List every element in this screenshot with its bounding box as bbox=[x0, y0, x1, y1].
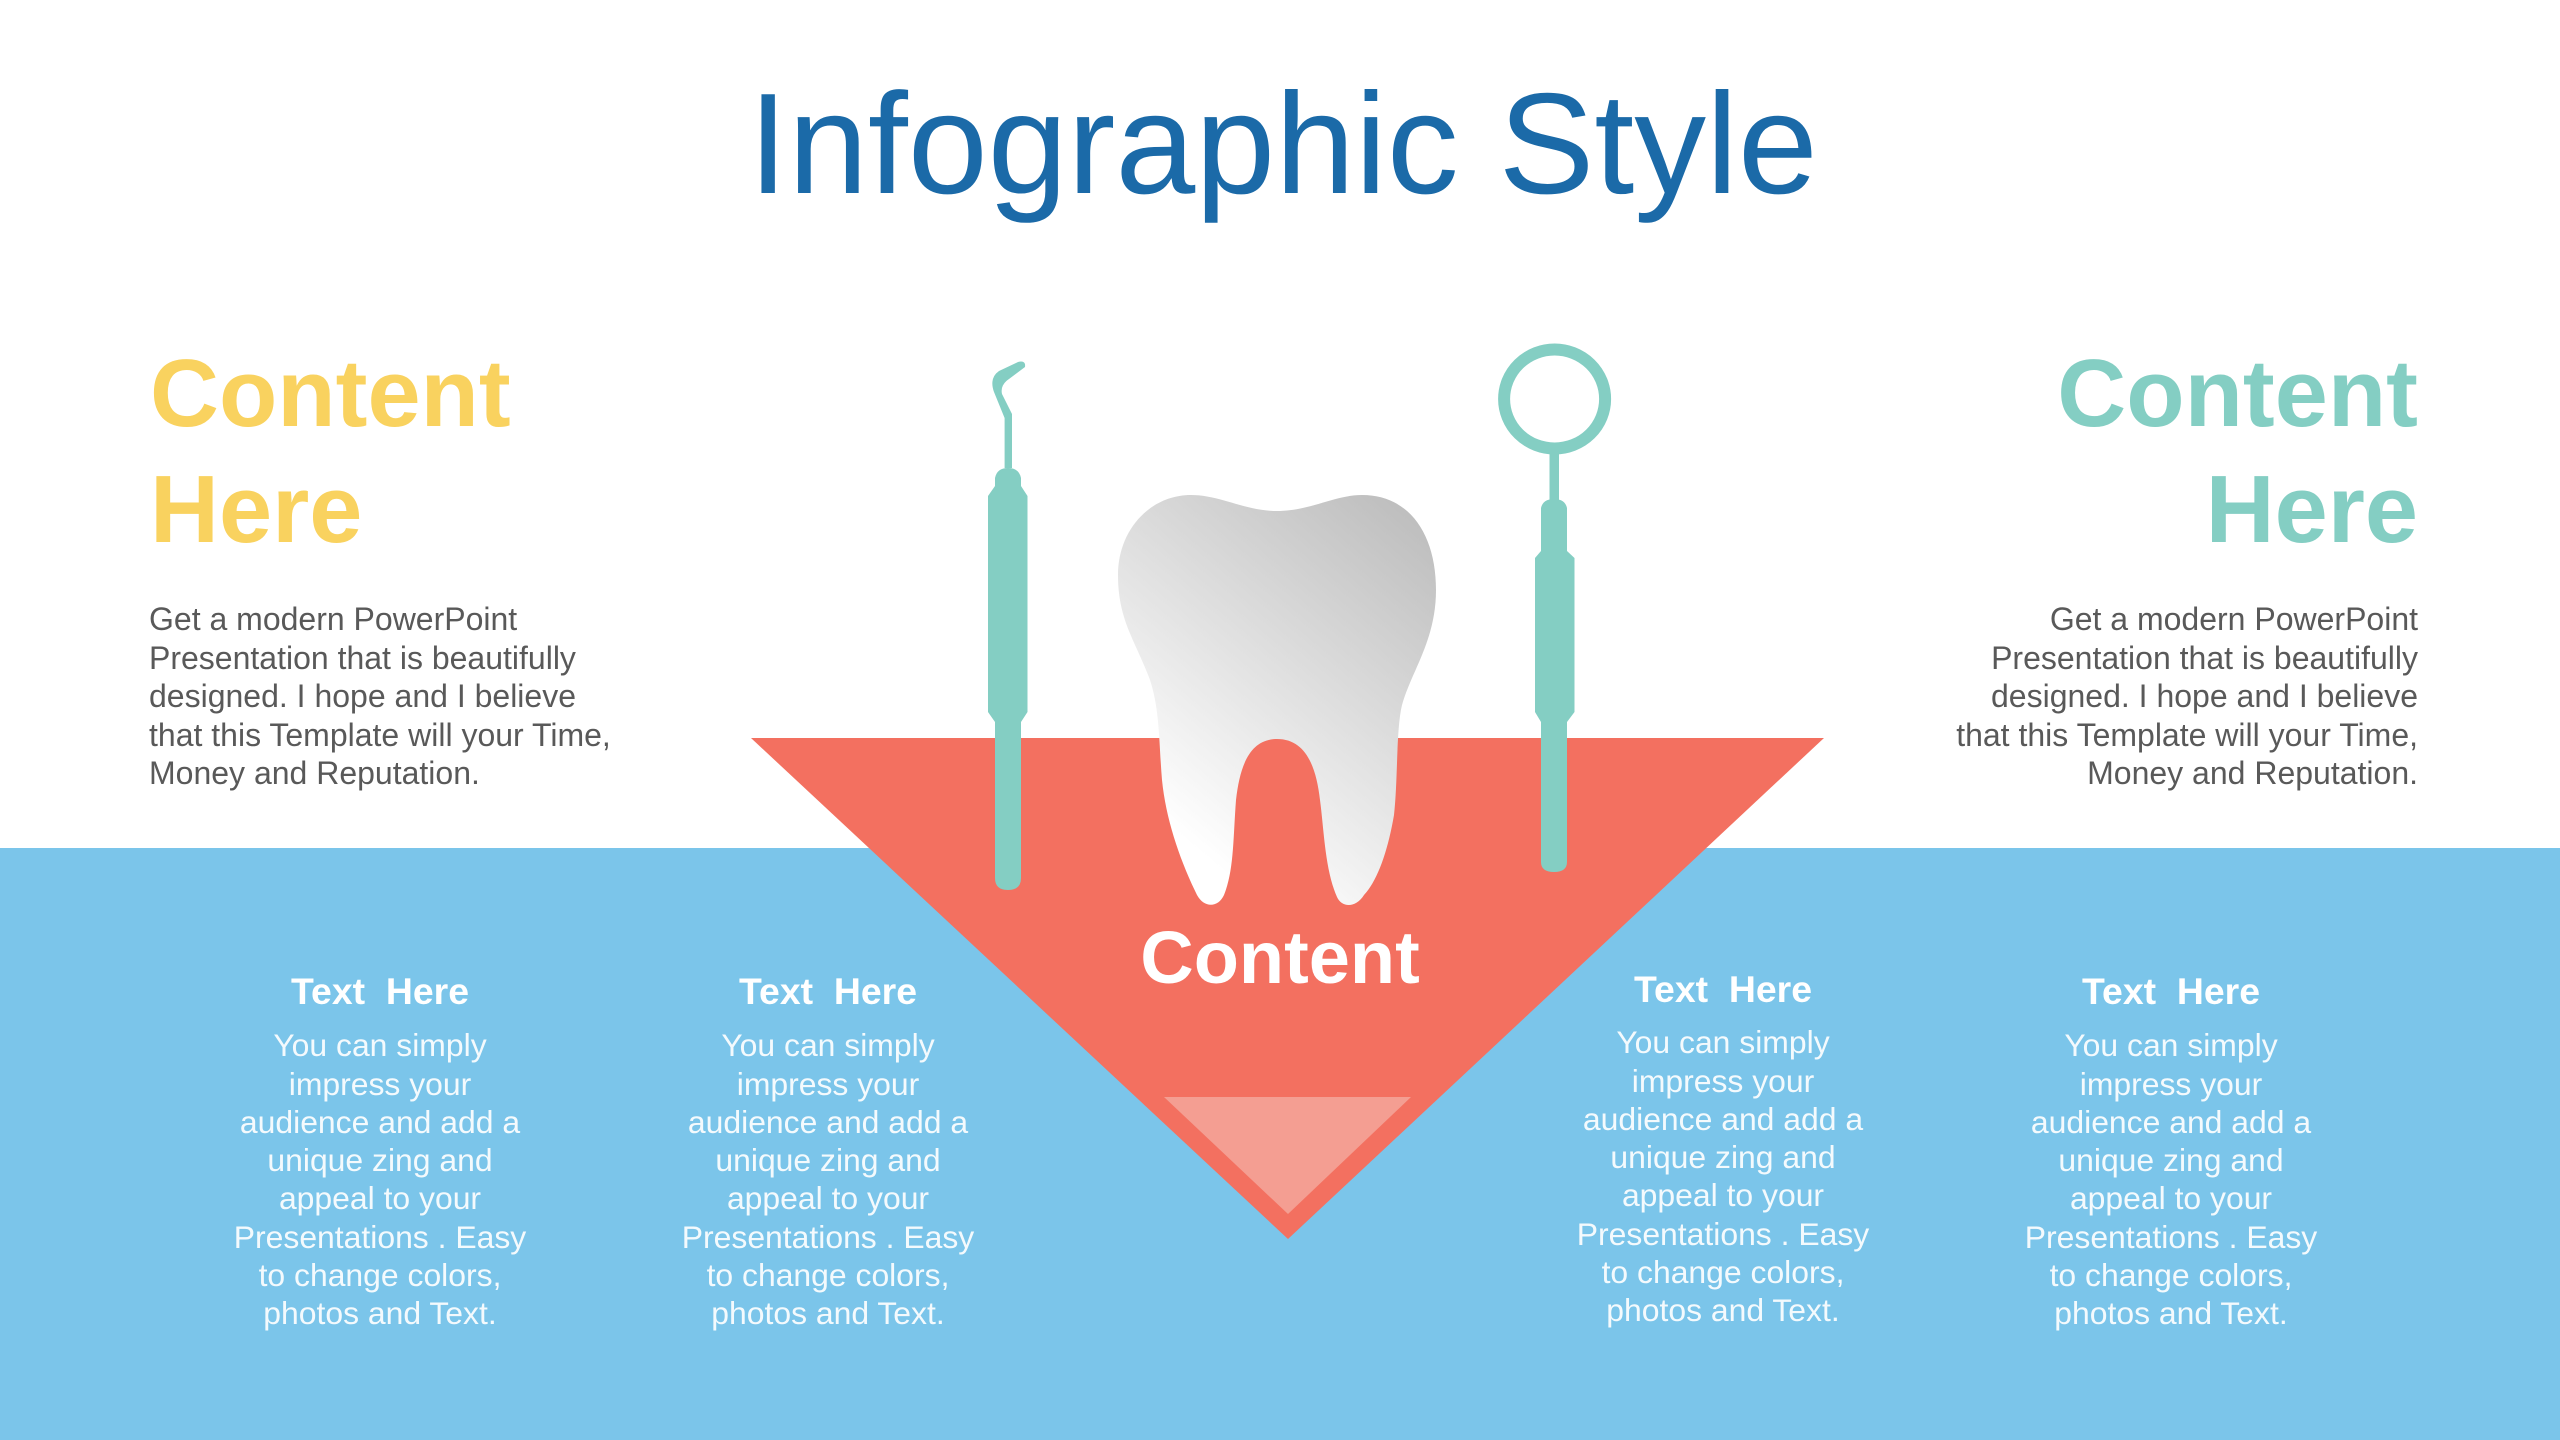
column 4 text: Presentations . Easy bbox=[2025, 1219, 2317, 1255]
title: Infographic Style bbox=[748, 64, 1818, 224]
icon: dental probe bbox=[988, 362, 1028, 890]
panel: column 4 bbox=[2025, 970, 2317, 1331]
column 1 heading: Text Here bbox=[291, 970, 469, 1012]
column 1 text: impress your bbox=[289, 1066, 472, 1102]
column 3 text: unique zing and bbox=[1610, 1139, 1836, 1175]
text block: top left: Get a modern PowerPoint bbox=[149, 601, 517, 637]
column 4 text: appeal to your bbox=[2070, 1180, 2272, 1216]
panel: column 3 bbox=[1577, 968, 1869, 1328]
blue background band bbox=[0, 848, 2560, 1440]
heading: top left: Content bbox=[150, 341, 511, 447]
column 1 text: to change colors, bbox=[259, 1257, 501, 1293]
text block: top left: designed. I hope and I believe bbox=[149, 678, 576, 714]
column 2 text: appeal to your bbox=[727, 1180, 929, 1216]
column 3 text: audience and add a bbox=[1583, 1101, 1863, 1137]
column 4 text: photos and Text. bbox=[2054, 1295, 2288, 1331]
column 1 text: You can simply bbox=[273, 1027, 487, 1063]
column 2 text: photos and Text. bbox=[711, 1295, 945, 1331]
column 2 text: impress your bbox=[737, 1066, 920, 1102]
column 3 text: appeal to your bbox=[1622, 1177, 1824, 1213]
column 3 heading: Text Here bbox=[1634, 968, 1812, 1010]
column 2 text: audience and add a bbox=[688, 1104, 968, 1140]
column 4 text: to change colors, bbox=[2050, 1257, 2292, 1293]
column 2 text: unique zing and bbox=[715, 1142, 941, 1178]
column 2 text: to change colors, bbox=[707, 1257, 949, 1293]
heading: top right: Here bbox=[2206, 457, 2418, 563]
heading: top left: Here bbox=[150, 457, 362, 563]
central label: Content bbox=[1140, 916, 1420, 999]
icon: dental mirror bbox=[1504, 350, 1605, 872]
panel: top left content bbox=[149, 341, 611, 791]
column 4 text: audience and add a bbox=[2031, 1104, 2311, 1140]
column 4 text: impress your bbox=[2080, 1066, 2263, 1102]
panel: column 1 bbox=[234, 970, 526, 1331]
column 2 heading: Text Here bbox=[739, 970, 917, 1012]
panel: top right content bbox=[1956, 341, 2418, 791]
column 2 text: Presentations . Easy bbox=[682, 1219, 974, 1255]
heading: top right: Content bbox=[2057, 341, 2418, 447]
column 1 text: Presentations . Easy bbox=[234, 1219, 526, 1255]
text block: top right: Presentation that is beautifully bbox=[1991, 640, 2418, 676]
column 3 text: impress your bbox=[1632, 1063, 1815, 1099]
column 1 text: photos and Text. bbox=[263, 1295, 497, 1331]
column 4 text: unique zing and bbox=[2058, 1142, 2284, 1178]
column 1 text: unique zing and bbox=[267, 1142, 493, 1178]
column 3 text: You can simply bbox=[1616, 1024, 1830, 1060]
column 4 text: You can simply bbox=[2064, 1027, 2278, 1063]
red triangle bbox=[751, 738, 1824, 1239]
text block: top left: Money and Reputation. bbox=[149, 755, 480, 791]
column 3 text: to change colors, bbox=[1602, 1254, 1844, 1290]
column 3 text: photos and Text. bbox=[1606, 1292, 1840, 1328]
icon: tooth bbox=[1118, 495, 1436, 905]
column 3 text: Presentations . Easy bbox=[1577, 1216, 1869, 1252]
text block: top left: that this Template will your Time, bbox=[149, 717, 611, 753]
inner light triangle bbox=[1164, 1097, 1411, 1214]
column 2 text: You can simply bbox=[721, 1027, 935, 1063]
text block: top right: that this Template will your Time, bbox=[1956, 717, 2418, 753]
text block: top right: Money and Reputation. bbox=[2087, 755, 2418, 791]
text block: top right: Get a modern PowerPoint bbox=[2050, 601, 2418, 637]
column 1 text: audience and add a bbox=[240, 1104, 520, 1140]
column 1 text: appeal to your bbox=[279, 1180, 481, 1216]
text block: top right: designed. I hope and I believe bbox=[1991, 678, 2418, 714]
panel: column 2 bbox=[682, 970, 974, 1331]
text block: top left: Presentation that is beautifully bbox=[149, 640, 576, 676]
column 4 heading: Text Here bbox=[2082, 970, 2260, 1012]
